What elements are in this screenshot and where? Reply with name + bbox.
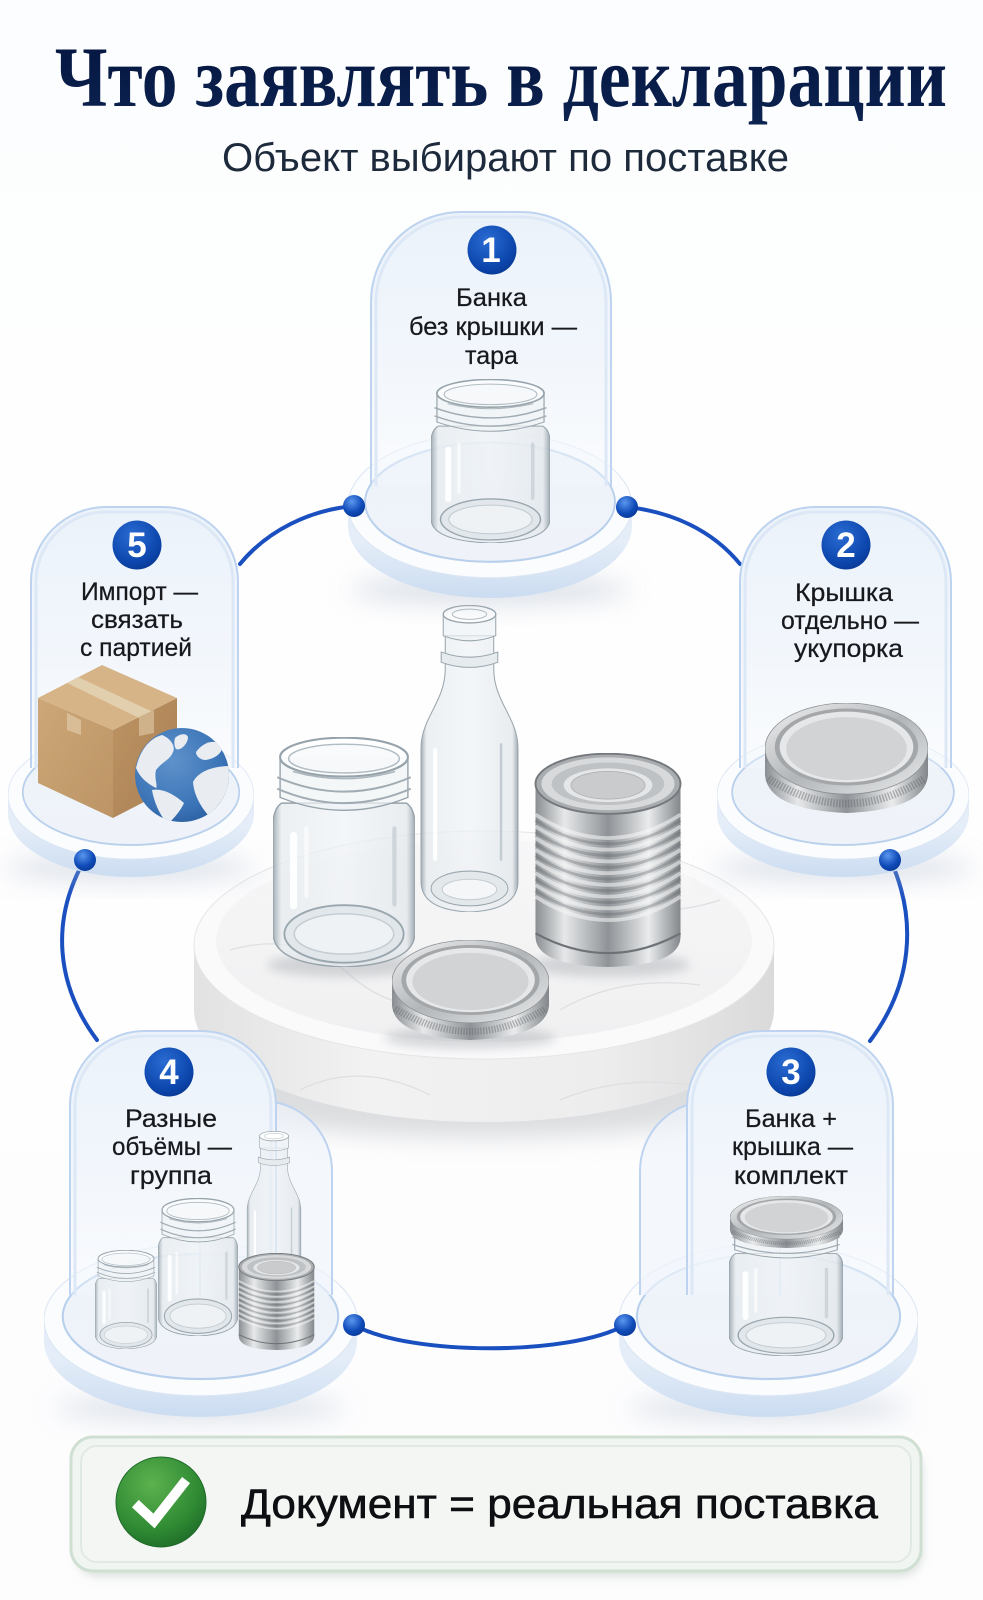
panel 4 back arch (200, 1101, 332, 1295)
panel 2 arch (740, 507, 951, 768)
panel 5 label (80, 578, 198, 662)
group of containers (95, 1131, 314, 1350)
badge 4: 4 (159, 1053, 179, 1092)
badge 1: 1 (481, 231, 501, 270)
banner text: Документ = реальная поставка (241, 1480, 879, 1527)
panel 4 arch (70, 1031, 276, 1295)
connector dots top (343, 495, 638, 518)
panel 2 label: отдельно — (781, 607, 919, 635)
badge 3: 3 (781, 1053, 801, 1092)
panel 1 arch (371, 212, 611, 486)
panel 5 label: связать (91, 606, 183, 634)
badge 4 (144, 1048, 194, 1096)
panel 3 label: Банка + (745, 1105, 837, 1133)
panel 2 label: Крышка (795, 579, 893, 607)
subtitle: Объект выбирают по поставке (222, 136, 789, 180)
badge 2: 2 (836, 526, 856, 565)
central tin can (535, 754, 681, 967)
panel 4 label (112, 1105, 232, 1190)
panel 1 label: Банка (456, 284, 527, 312)
icon: green check (116, 1457, 206, 1547)
icon: cardboard box (38, 665, 177, 818)
connector dots middle (74, 849, 901, 871)
badge 5: 5 (127, 526, 147, 565)
jar without lid (431, 380, 550, 543)
panel 2 label (781, 579, 919, 663)
panel 5 (5, 507, 255, 882)
badge 1 (468, 226, 516, 274)
connector dots bottom (343, 1314, 636, 1336)
panel 3 label (732, 1105, 853, 1190)
panel 3 label: крышка — (732, 1133, 853, 1161)
panel 4 (44, 1031, 357, 1422)
central glass jar (273, 738, 415, 967)
connector ring (62, 506, 907, 1348)
banner (71, 1437, 922, 1576)
panel 3 label: комплект (734, 1162, 849, 1190)
panel 4 label: объёмы — (112, 1133, 232, 1161)
central metal lid (392, 940, 549, 1040)
panel 3 (619, 1031, 918, 1422)
panel 3 back arch (640, 1101, 780, 1295)
panel 4 label: Разные (125, 1105, 217, 1133)
panel 1 (348, 212, 632, 606)
shadows under central objects (267, 953, 690, 1049)
metal lid (765, 703, 928, 813)
panel 2 label: укупорка (794, 635, 903, 663)
badge 5 (112, 520, 162, 570)
panel 1 label: без крышки — (409, 313, 577, 341)
panel 3 arch (687, 1031, 893, 1295)
panel 1 label: тара (465, 342, 518, 370)
panel 2 (713, 507, 973, 882)
panel 1 label (409, 284, 577, 370)
panel 5 arch (31, 507, 238, 768)
central platform (184, 831, 784, 1138)
panel 5 label: с партией (80, 634, 192, 662)
badge 3 (766, 1048, 816, 1096)
badge 2 (822, 520, 870, 570)
central bottle (421, 606, 518, 912)
panel 5 label: Импорт — (81, 578, 198, 606)
jar with lid (729, 1196, 843, 1356)
panel 4 label: группа (130, 1162, 212, 1190)
icon: globe (135, 728, 230, 824)
